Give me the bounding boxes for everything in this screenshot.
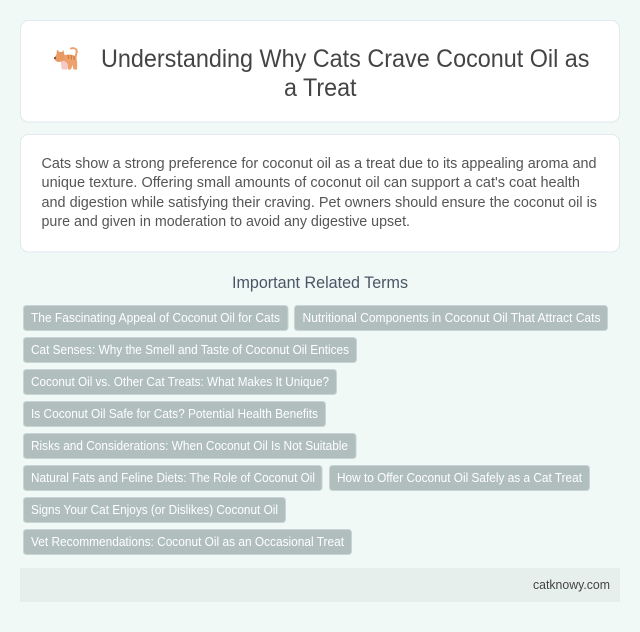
tag: safety	[24, 402, 326, 426]
text block: description	[42, 155, 597, 230]
footer source: catknowy.com	[533, 577, 610, 592]
tag: how to offer: How to Offer Coconut Oil Safely as a Cat Treat	[337, 471, 582, 485]
heading: related terms: Important Related Terms	[232, 274, 408, 292]
footer	[20, 568, 620, 602]
text block: description: unique texture. Offering small amounts of coconut oil can support a cat's coat health	[42, 174, 580, 191]
tag: cat senses	[24, 338, 356, 362]
text block: description: pure and given in moderation to avoid any digestive upset.	[42, 213, 410, 230]
tag: vet recommendations: Vet Recommendations: Coconut Oil as an Occasional Treat	[31, 535, 344, 549]
tag: natural fats	[24, 466, 322, 490]
panel: description	[20, 134, 620, 252]
title: a Treat	[284, 74, 357, 102]
text block: description: and digestion while satisfying their craving. Pet owners should ensure the coconut oil is	[42, 194, 597, 211]
tag: fascinating appeal	[24, 306, 288, 330]
panel: title card	[20, 20, 620, 122]
tag: signs	[24, 498, 286, 522]
tag: signs: Signs Your Cat Enjoys (or Dislikes) Coconut Oil	[31, 503, 278, 517]
tag: fascinating appeal: The Fascinating Appeal of Coconut Oil for Cats	[31, 311, 280, 325]
tag: nutritional components: Nutritional Components in Coconut Oil That Attract Cats	[302, 311, 600, 325]
tag: vet recommendations	[24, 530, 352, 554]
text block: description: Cats show a strong preference for coconut oil as a treat due to its appealing aroma and	[42, 155, 596, 172]
title	[101, 45, 590, 102]
tag: other treats: Coconut Oil vs. Other Cat Treats: What Makes It Unique?	[31, 375, 329, 389]
tag: how to offer	[330, 466, 590, 490]
tag: safety: Is Coconut Oil Safe for Cats? Potential Health Benefits	[31, 407, 318, 421]
tag: natural fats: Natural Fats and Feline Diets: The Role of Coconut Oil	[31, 471, 315, 485]
title: Understanding Why Cats Crave Coconut Oil as	[101, 45, 590, 73]
tag: risks: Risks and Considerations: When Coconut Oil Is Not Suitable	[31, 439, 348, 453]
tag: nutritional components	[294, 306, 608, 330]
tag: cat senses: Cat Senses: Why the Smell and Taste of Coconut Oil Entices	[31, 343, 349, 357]
tag: risks	[24, 434, 356, 458]
tag: other treats	[24, 370, 336, 394]
icon: cat	[54, 48, 77, 70]
